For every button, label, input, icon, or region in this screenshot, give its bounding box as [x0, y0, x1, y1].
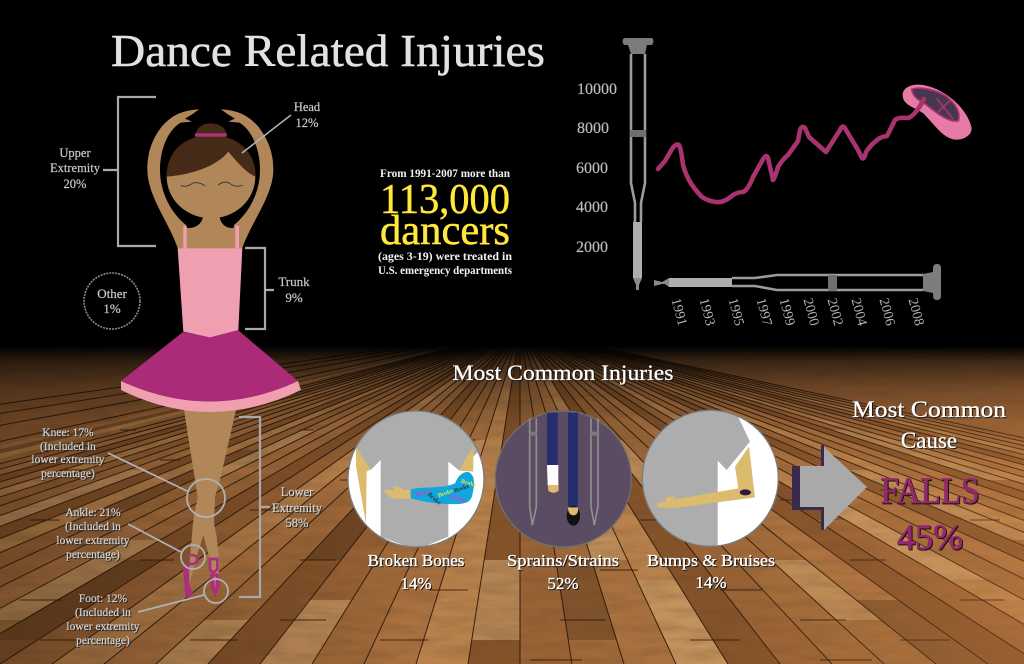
statistic: 113,000 dancers	[378, 168, 513, 277]
callout: knee	[108, 453, 225, 517]
x axis labels	[668, 297, 926, 328]
x axis labels: 1991	[668, 297, 689, 328]
label: lower extremity: Extremity	[272, 501, 323, 515]
y axis labels: 10000	[577, 81, 617, 98]
label: bumps and bruises: Bumps & Bruises	[647, 551, 775, 570]
label: broken bones: 14%	[400, 574, 432, 593]
x axis labels: 2004	[848, 297, 869, 328]
icon: broken arm: Broke	[426, 492, 442, 507]
bodice	[178, 248, 242, 337]
background: wood floor	[0, 330, 1024, 664]
panel: sprains and strains	[495, 411, 631, 593]
arrow	[792, 445, 867, 530]
icon: legs and crutches	[495, 411, 631, 547]
bracket: trunk	[245, 248, 274, 329]
label: sprains and strains: Sprains/Strains	[507, 551, 619, 570]
icon: broken arm: Broke	[454, 483, 471, 495]
chart: injuries per year	[576, 38, 972, 328]
x axis labels: 2008	[905, 297, 926, 328]
x axis labels: 1999	[776, 297, 797, 328]
label: knee: (Included in	[40, 441, 96, 453]
icon: broken arm	[347, 410, 487, 550]
pointer: head	[242, 115, 291, 153]
label: upper extremity: Upper	[59, 146, 91, 160]
bracket: lower extremity	[239, 417, 270, 597]
statistic: 113,000 dancers: From 1991-2007 more than	[380, 168, 511, 180]
icon: bruised elbow	[637, 403, 778, 550]
statistic: falls 45%	[880, 471, 980, 557]
statistic: 113,000 dancers: 113,000	[380, 177, 510, 223]
icon: broken arm: Broke	[437, 488, 454, 499]
callout: other	[84, 273, 140, 329]
arms	[147, 109, 199, 250]
callout: foot	[138, 579, 228, 612]
label: foot: percentage)	[76, 635, 130, 647]
y axis labels: 4000	[576, 199, 608, 216]
statistic: falls 45%: FALLS	[880, 471, 980, 512]
label: upper extremity: 20%	[64, 177, 86, 191]
label: bumps and bruises: 14%	[695, 573, 727, 592]
ballet shoes	[183, 555, 220, 597]
label: ankle: (Included in	[65, 521, 121, 533]
icon: broken arm: Broke	[414, 489, 431, 499]
x axis labels: 1993	[696, 297, 717, 328]
label: ankle: lower extremity	[56, 535, 130, 547]
y axis labels: 6000	[576, 160, 608, 177]
callout: other: 1%	[103, 301, 121, 316]
icon: broken arm: Broke	[460, 479, 477, 489]
ballerina skirt	[121, 330, 301, 412]
x axis labels: 1997	[753, 297, 774, 328]
x axis labels: 2000	[800, 297, 821, 328]
label: ankle: percentage)	[66, 549, 120, 561]
y axis: vertical crutch	[622, 38, 654, 290]
label: upper extremity: Extremity	[50, 161, 101, 175]
heading: most common injuries: Most Common Injuries	[452, 360, 674, 385]
label: head: Head	[294, 100, 321, 114]
x axis labels: 2002	[824, 297, 845, 328]
label: lower extremity: Lower	[281, 485, 314, 499]
icon: broken arm: Broke	[449, 494, 466, 504]
y axis labels	[576, 81, 617, 256]
label: foot: lower extremity	[66, 621, 140, 633]
statistic: falls 45%: 45%	[897, 517, 963, 557]
heading: most common cause: Cause	[901, 428, 957, 453]
statistic: 113,000 dancers: dancers	[380, 208, 510, 254]
ballerina upper body	[147, 109, 273, 337]
label: trunk: 9%	[285, 290, 303, 305]
statistic: 113,000 dancers: (ages 3-19) were treated in	[378, 251, 513, 263]
x axis labels: 2006	[876, 297, 897, 328]
panel: bumps and bruises	[637, 403, 778, 592]
callout: other: Other	[97, 286, 127, 301]
statistic: 113,000 dancers: U.S. emergency departments	[378, 265, 512, 277]
label: knee: percentage)	[41, 468, 95, 480]
label: lower extremity: 58%	[286, 516, 308, 530]
y axis labels: 2000	[576, 239, 608, 256]
y axis labels: 8000	[577, 120, 609, 137]
x axis: horizontal crutch	[654, 264, 941, 300]
ballerina figure	[121, 109, 301, 597]
heading: most common cause: Most Common	[852, 397, 1007, 422]
label: ankle: Ankle: 21%	[65, 507, 121, 519]
head	[167, 135, 255, 218]
label: sprains and strains: 52%	[547, 574, 579, 593]
label: knee: lower extremity	[31, 454, 105, 466]
label: broken bones: Broken Bones	[368, 551, 464, 570]
label: foot: (Included in	[75, 607, 131, 619]
x axis labels: 1995	[725, 297, 746, 328]
title: Dance Related Injuries	[111, 25, 545, 76]
label: head: 12%	[296, 116, 318, 130]
data line	[658, 99, 924, 202]
label: foot: Foot: 12%	[79, 593, 128, 605]
label: knee: Knee: 17%	[42, 427, 94, 439]
panel: broken bones	[347, 410, 487, 593]
label: trunk: Trunk	[278, 274, 310, 289]
bracket: upper extremity	[103, 97, 156, 246]
ballerina legs	[183, 410, 236, 597]
callout: ankle	[128, 524, 205, 569]
ballet shoe marker	[903, 85, 972, 140]
